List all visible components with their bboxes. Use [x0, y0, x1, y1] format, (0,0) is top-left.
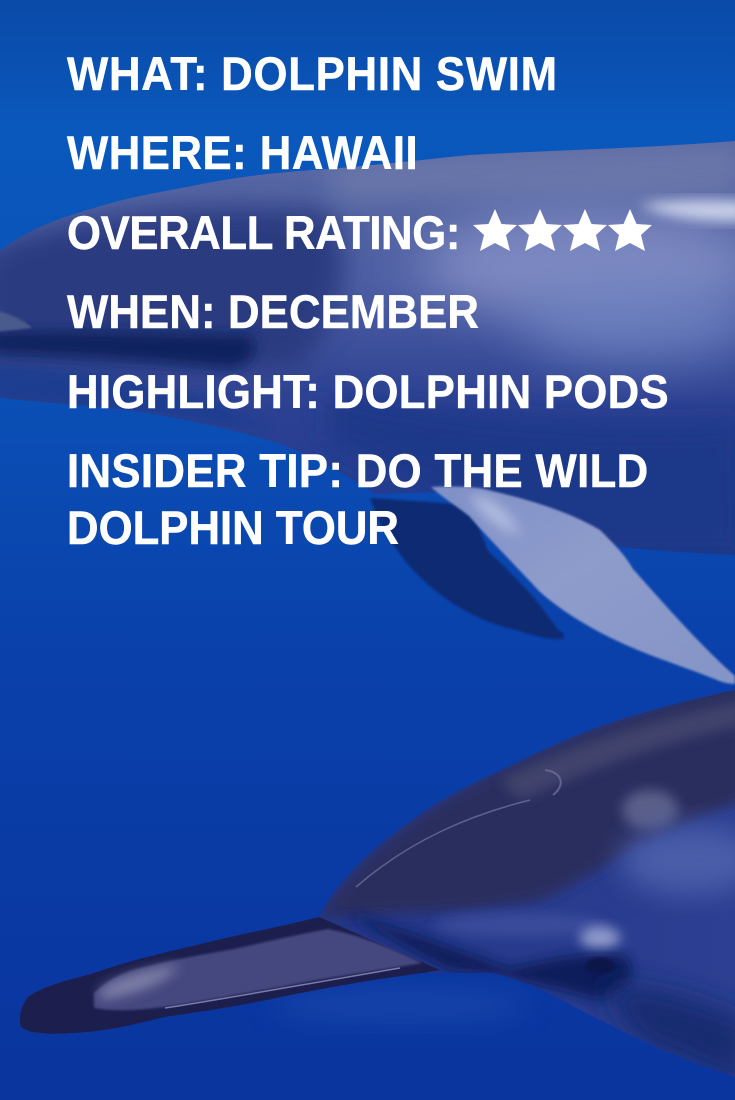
snout tip	[0, 310, 32, 332]
cape highlight	[622, 790, 678, 830]
dark mouth band	[0, 332, 255, 368]
line: what: WHAT: DOLPHIN SWIM	[67, 48, 557, 100]
dark rear flipper	[370, 498, 564, 639]
dark mouth crease	[345, 912, 632, 1000]
water reflection below lower dolphin	[270, 987, 530, 1023]
line: insider tip: INSIDER TIP: DO THE WILD	[67, 445, 648, 497]
cheek highlight	[580, 926, 620, 950]
beak dark	[15, 917, 440, 1036]
upper head dark cape	[319, 680, 735, 917]
lower jaw	[0, 364, 251, 426]
upper dolphin	[0, 130, 735, 684]
light front flipper	[431, 486, 735, 684]
line: highlight: HIGHLIGHT: DOLPHIN PODS	[67, 366, 669, 418]
head shading	[0, 206, 344, 370]
upper dolphin body	[0, 130, 735, 560]
bright stripe	[640, 200, 735, 222]
pale flank lower	[520, 275, 735, 365]
lower dolphin base flank	[0, 680, 735, 1090]
line: overall rating: OVERALL RATING:	[67, 207, 460, 259]
flank glow	[620, 825, 735, 895]
pale top ridge	[330, 145, 735, 200]
lower dolphin	[0, 680, 735, 1090]
beak light band	[94, 929, 422, 1010]
belly dark fade	[600, 985, 735, 1085]
line: when: WHEN: DECEMBER	[67, 286, 479, 338]
line: insider tip continued: DOLPHIN TOUR	[67, 502, 399, 554]
dark belly	[330, 390, 735, 560]
scar line on head	[356, 800, 530, 887]
icon: four star rating	[473, 209, 652, 251]
bright flank	[420, 210, 735, 320]
beak lower line	[165, 968, 400, 1008]
beak tip shine	[100, 965, 180, 1000]
text block	[67, 48, 669, 554]
eye	[586, 958, 614, 974]
line: where: WHERE: HAWAII	[67, 127, 418, 179]
flipper shine	[470, 495, 520, 535]
blowhole ring	[545, 770, 561, 795]
cape rim light	[500, 700, 735, 800]
cheek glow	[435, 913, 605, 937]
